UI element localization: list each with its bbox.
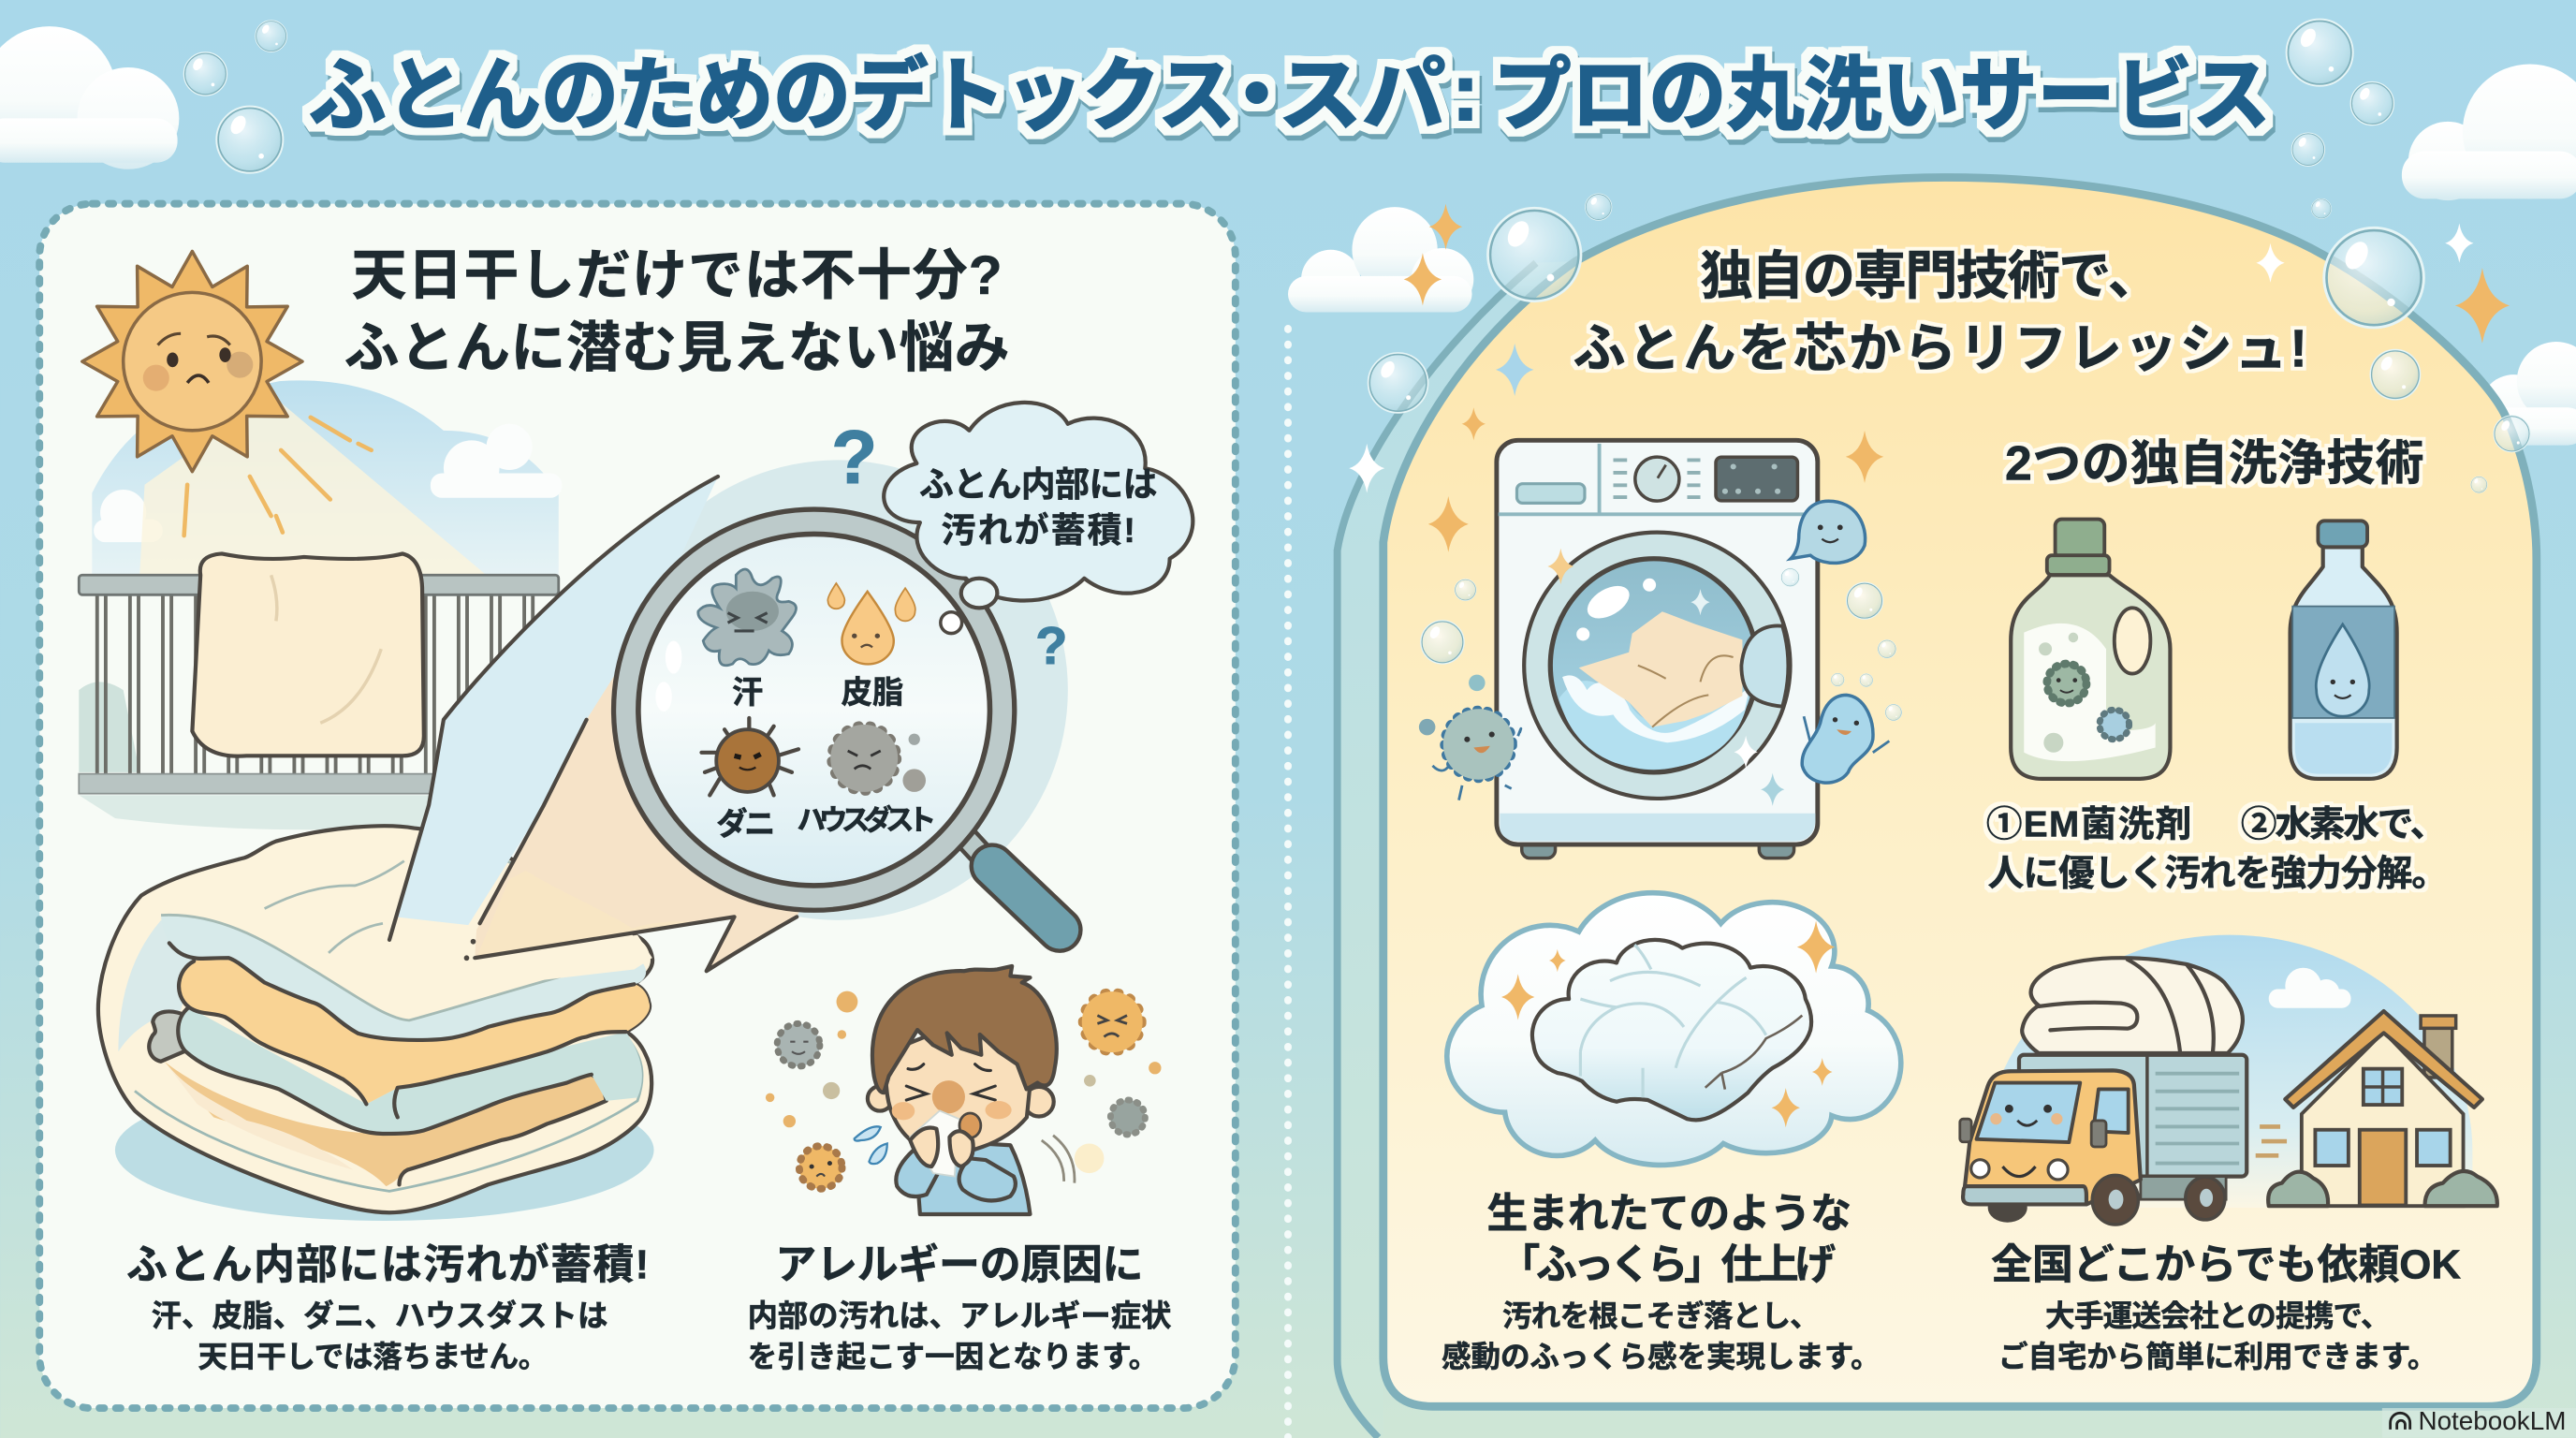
thought bubble text: 汚れが蓄積! (942, 511, 1135, 550)
mascot: bean (1802, 695, 1889, 783)
speed lines (2256, 1126, 2287, 1155)
heading: right panel (1573, 246, 2307, 377)
illustration: washing machine (1419, 440, 1902, 858)
sparkles (1349, 204, 2510, 552)
truck chassis (2141, 1177, 2226, 1199)
truck box (2019, 1055, 2247, 1177)
caption: washing tech: ②水素水で、 (2241, 804, 2446, 844)
arch outer band (1338, 261, 1575, 1438)
boy arms (896, 1151, 1016, 1200)
gray fluff (149, 1012, 185, 1062)
balcony floor and railing (79, 575, 559, 829)
allergens (766, 991, 1162, 1189)
boy ears (868, 1086, 1054, 1117)
tears and motion lines (855, 1126, 887, 1164)
futon outer shell (98, 826, 652, 1212)
truck hubcaps (2109, 1189, 2213, 1210)
mascot: blue ghost (1791, 501, 1866, 563)
illustration: balcony scene (79, 380, 562, 829)
caption: fluffy finish: 汚れを根こそぎ落とし、 (1502, 1299, 1820, 1332)
blue layer (178, 1007, 642, 1134)
panel: problems (left) (39, 204, 1236, 1408)
magnifier handle (966, 838, 1060, 930)
title: ふとんのためのデトックス (309, 51, 1236, 141)
illustration: EM detergent bottle (2011, 520, 2170, 779)
panel: solution (right arch) (1338, 178, 2537, 1438)
top layer blue rim (161, 915, 646, 1040)
cloud: top left (0, 26, 179, 169)
arch bubbles (1368, 194, 2530, 493)
drop: sebum (827, 583, 915, 664)
mascot: germ (1419, 675, 1521, 800)
label: sweat: 汗 (732, 676, 763, 711)
background bubbles (184, 20, 2393, 172)
caption: futon dirt: 汗、皮脂、ダニ、ハウスダストは (152, 1298, 607, 1332)
truck wheels (2092, 1175, 2225, 1225)
title: プロの丸洗いサービス (1493, 51, 2271, 141)
illustration: truck and house (1960, 935, 2497, 1225)
caption: allergy (748, 1241, 1171, 1373)
quilting lines (161, 831, 637, 1020)
truck wheel rear small (1988, 1193, 2027, 1223)
cloud: behind arch left (1288, 207, 1473, 312)
caption: nationwide: 全国どこからでも依頼OK (1991, 1241, 2461, 1287)
label: sebum: 皮脂 (842, 676, 903, 711)
washer bubbles (1421, 568, 1902, 721)
boy body (916, 1142, 1030, 1214)
caption: fluffy finish: 生まれたてのような (1486, 1191, 1852, 1237)
house (2285, 1011, 2482, 1206)
title: スパ (1278, 51, 1445, 141)
question marks: ? (1035, 616, 1067, 675)
divider dots (1286, 329, 1290, 1438)
caption: nationwide: 大手運送会社との提携で、 (2045, 1299, 2391, 1332)
illustration: fluffy cloud futon (1447, 893, 1901, 1165)
question marks: ? (831, 416, 877, 500)
notebooklm watermark: NotebookLM (2418, 1406, 2566, 1435)
illustration: hydrogen water bottle (2291, 521, 2397, 779)
zoom wedge from futon to magnifier (389, 477, 855, 986)
heading: left panel: ふとんに潜む見えない悩み (344, 317, 1010, 378)
truck cab (1960, 1070, 2141, 1204)
icon: sad sun (82, 252, 302, 472)
caption: fluffy finish: 「ふっくら」仕上げ (1500, 1241, 1836, 1287)
thought bubble text: ふとん内部には (919, 465, 1157, 504)
caption: nationwide (1991, 1241, 2461, 1373)
thought bubble (884, 403, 1193, 634)
heading: left panel (344, 245, 1010, 378)
light beam (139, 394, 487, 575)
heading: left panel: 天日干しだけでは不十分? (352, 245, 1003, 306)
washer door (1524, 533, 1791, 799)
boy expression (892, 1064, 1012, 1120)
boy face (886, 1019, 1032, 1157)
orange layer (179, 958, 650, 1104)
heading: right panel: 独自の専門技術で、 (1701, 246, 2160, 305)
label: house dust: ハウスダスト (797, 803, 936, 836)
heading: right panel: ふとんを芯からリフレッシュ! (1573, 318, 2307, 377)
caption: allergy: を引き起こす一因となります。 (748, 1340, 1158, 1373)
arch inner cream (1383, 178, 2537, 1406)
dust (830, 725, 926, 792)
question marks (831, 416, 1067, 675)
caption: futon dirt: 天日干しでは落ちません。 (198, 1340, 548, 1373)
caption: fluffy finish (1442, 1191, 1881, 1373)
caption: futon dirt (126, 1241, 649, 1373)
lower orange layer (165, 1062, 607, 1186)
caption: fluffy finish: 感動のふっくら感を実現します。 (1442, 1340, 1881, 1373)
cloud: right edge (2479, 342, 2576, 446)
caption: washing tech (1986, 804, 2448, 894)
caption: allergy: 内部の汚れは、アレルギー症状 (748, 1299, 1171, 1332)
illustration: sneezing boy (766, 966, 1162, 1214)
mite (701, 718, 798, 795)
cloud: top right (2402, 64, 2576, 200)
futon roll (2022, 958, 2243, 1053)
boy hair (872, 966, 1057, 1093)
thought bubble text (919, 465, 1157, 550)
title: ・ (1217, 51, 1297, 141)
puffy futon (1532, 940, 1811, 1120)
caption: futon dirt: ふとん内部には汚れが蓄積! (126, 1241, 649, 1287)
towel (192, 553, 424, 756)
pale circle behind magnifier (607, 460, 1068, 920)
label: mite: ダニ (716, 807, 775, 843)
illustration: folded futon (98, 826, 654, 1221)
caption: washing tech: 人に優しく汚れを強力分解。 (1988, 854, 2448, 894)
tissue and hands (910, 1110, 981, 1177)
sun rays (184, 418, 372, 536)
germ: sweat (698, 569, 796, 666)
caption: nationwide: ご自宅から簡単に利用できます。 (1998, 1340, 2437, 1373)
bushes (2268, 1172, 2328, 1206)
magnifier (614, 509, 1060, 930)
washer sparkles (1547, 549, 1784, 806)
caption: washing tech: ①EM菌洗剤 (1986, 804, 2191, 844)
subheading: two technologies: 2つの独自洗浄技術 (2005, 435, 2424, 490)
title (309, 48, 2271, 141)
title: : (1452, 48, 1479, 138)
caption: allergy: アレルギーの原因に (775, 1241, 1144, 1287)
